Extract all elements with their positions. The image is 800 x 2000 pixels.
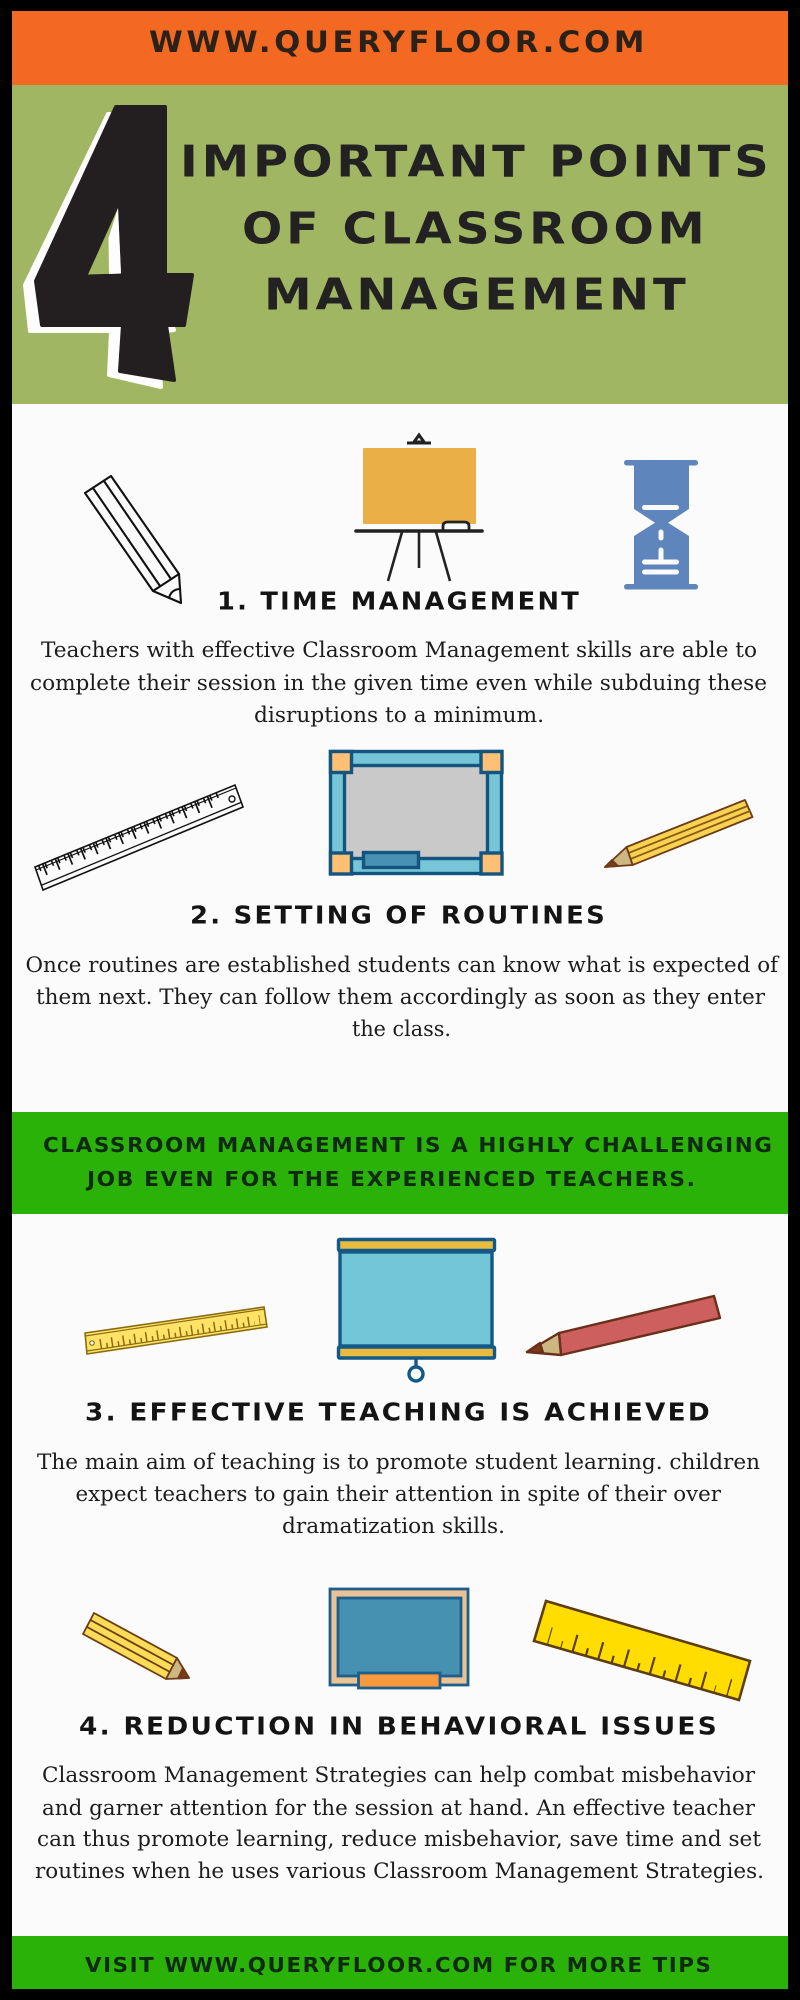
text: routines paragraph: [26, 953, 780, 1042]
text: effective teaching paragraph: [37, 1450, 760, 1539]
banner website text: WWW.QUERYFLOOR.COM: [149, 25, 648, 59]
panel: title header: [12, 85, 788, 404]
callout text: CLASSROOM MANAGEMENT IS A HIGHLY CHALLENGING: [43, 1133, 774, 1157]
icon: big number 4: [25, 107, 192, 387]
text: time management paragraph: Teachers with effective Classroom Management skills are able to: [41, 638, 757, 663]
heading: behavioral issues: 4. REDUCTION IN BEHAVIORAL ISSUES: [79, 1712, 719, 1740]
text: behavioral issues paragraph: [35, 1763, 764, 1884]
title text: IMPORTANT POINTS: [180, 136, 772, 188]
panel: white lower content area: [12, 1214, 788, 1936]
panel: green callout band: [12, 1112, 788, 1214]
panel: green footer: [12, 1936, 788, 1989]
heading: effective teaching: 3. EFFECTIVE TEACHING IS ACHIEVED: [85, 1398, 712, 1426]
text: behavioral issues paragraph: and garner attention for the session at hand. An effective teacher: [42, 1796, 756, 1821]
icon: outlined black pencil: [85, 476, 181, 603]
icon: small yellow pencil: [83, 1613, 189, 1679]
text: effective teaching paragraph: The main aim of teaching is to promote student learning. children: [37, 1450, 760, 1475]
heading: setting of routines: 2. SETTING OF ROUTINES: [190, 900, 607, 930]
text: behavioral issues paragraph: routines when he uses various Classroom Management Strategies.: [35, 1859, 764, 1884]
text: routines paragraph: Once routines are established students can know what is expected of: [26, 953, 780, 978]
title text: OF CLASSROOM: [242, 204, 708, 254]
icon: blue hourglass: [624, 460, 698, 590]
text: routines paragraph: them next. They can follow them accordingly as soon as they enter: [36, 985, 766, 1010]
text: time management paragraph: [30, 638, 767, 728]
text: effective teaching paragraph: expect teachers to gain their attention in spite of their over: [76, 1482, 722, 1507]
text: time management paragraph: disruptions to a minimum.: [254, 703, 544, 728]
icon: red pencil: [527, 1296, 720, 1355]
icon: blue roller screen: [338, 1240, 494, 1381]
text: routines paragraph: the class.: [352, 1017, 451, 1042]
panel: top orange banner: [12, 11, 788, 85]
icon: whiteboard with blue frame: [330, 752, 502, 874]
panel: white content area: [12, 404, 788, 1112]
callout text: JOB EVEN FOR THE EXPERIENCED TEACHERS.: [85, 1167, 697, 1191]
text: time management paragraph: complete their session in the given time even while subduing these: [30, 671, 767, 696]
title text: MANAGEMENT: [264, 270, 690, 320]
icon: outlined black ruler: [35, 785, 243, 890]
text: behavioral issues paragraph: can thus promote learning, reduce misbehavior, save time and set: [37, 1827, 761, 1852]
icon: big yellow ruler: [534, 1601, 750, 1700]
heading: time management: 1. TIME MANAGEMENT: [217, 586, 581, 616]
callout text: [43, 1133, 774, 1191]
text: effective teaching paragraph: dramatization skills.: [282, 1514, 505, 1539]
title text: [180, 136, 772, 320]
text: behavioral issues paragraph: Classroom Management Strategies can help combat misbehavior: [42, 1763, 756, 1788]
icon: yellow pencil: [605, 800, 752, 867]
icon: blue chalkboard: [330, 1589, 468, 1688]
footer text: VISIT WWW.QUERYFLOOR.COM FOR MORE TIPS: [85, 1953, 712, 1977]
icon: easel with orange board: [356, 435, 482, 581]
icon: small yellow ruler: [85, 1307, 267, 1354]
